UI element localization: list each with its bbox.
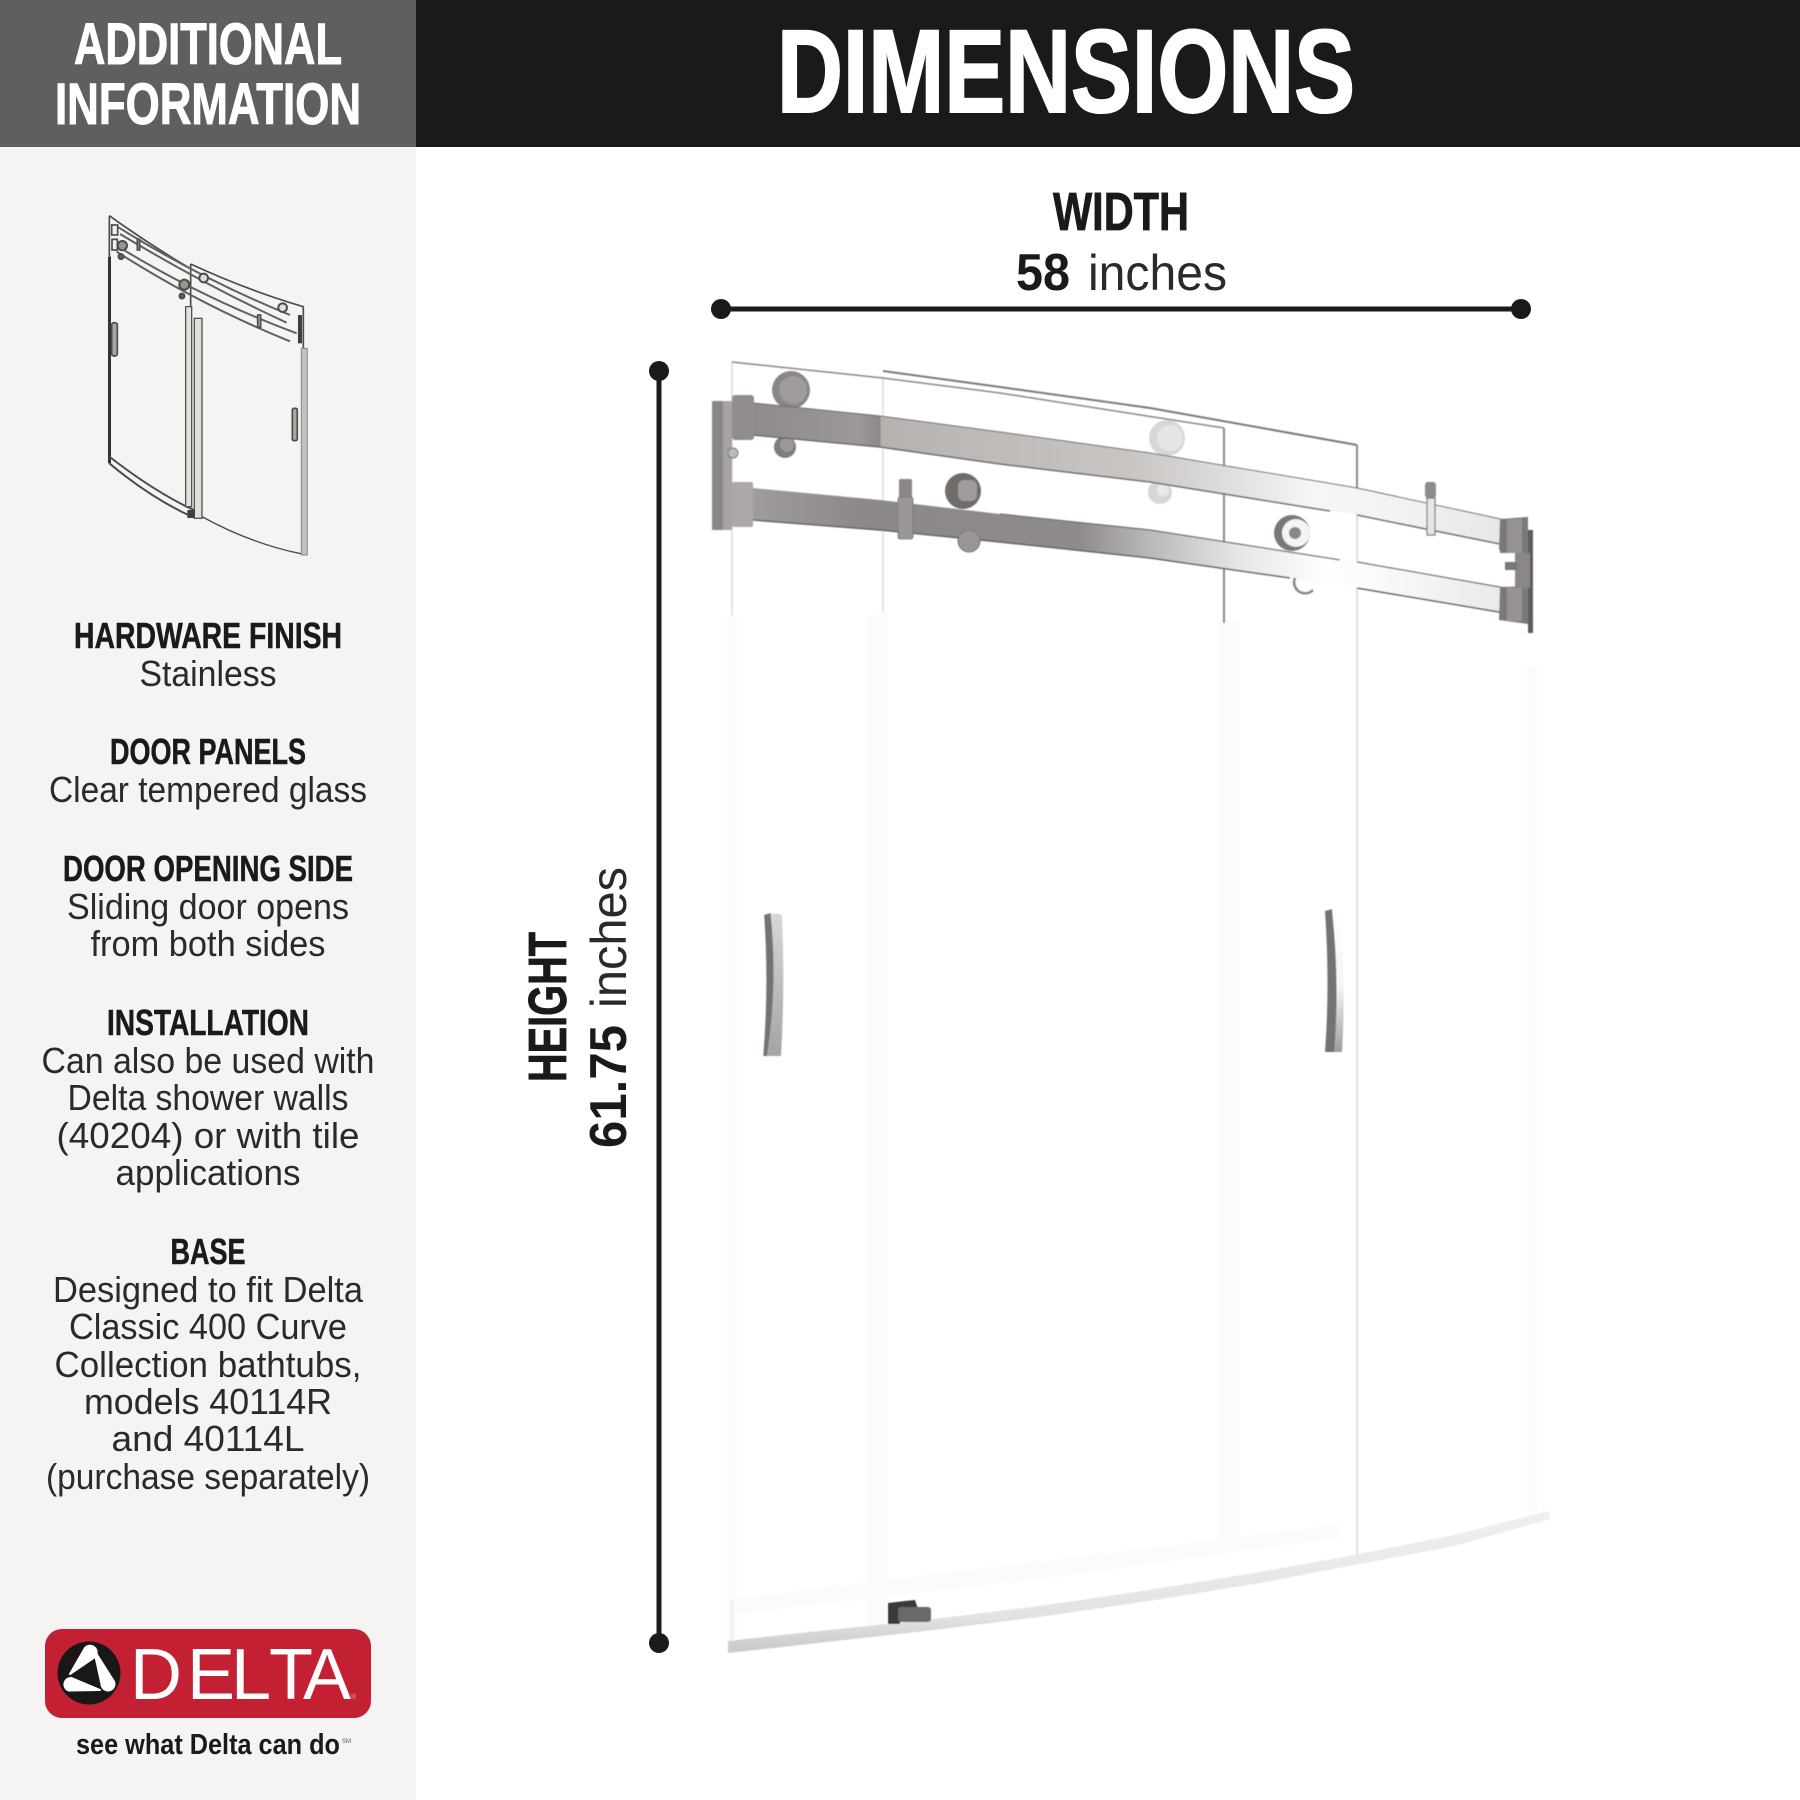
handle: left <box>763 913 783 1056</box>
spec: door opening side: Sliding door opens <box>67 886 349 927</box>
logo: delta: see what Delta can do <box>76 1729 340 1761</box>
curved bottom sill <box>728 1511 1551 1653</box>
wheel: top right <box>1149 420 1185 456</box>
spec: door opening side: from both sides <box>90 923 326 964</box>
spec: base: Classic 400 Curve <box>69 1306 347 1347</box>
spec: hardware finish <box>74 615 342 694</box>
spec: hardware finish: HARDWARE FINISH <box>74 615 342 656</box>
spec: base: BASE <box>170 1231 246 1272</box>
header: dimensions title: DIMENSIONS <box>777 6 1355 138</box>
spec: base <box>46 1231 370 1497</box>
rail: top <box>732 395 1505 545</box>
nuts under top rail <box>774 436 1172 504</box>
clip on lower rail <box>898 479 913 539</box>
left wall bracket <box>712 401 738 530</box>
spec: door panels <box>49 731 367 810</box>
spec: base: models 40114R <box>84 1381 332 1422</box>
spec: base: Collection bathtubs, <box>54 1344 362 1385</box>
height label <box>518 867 638 1148</box>
shower door illustration <box>712 362 1551 1653</box>
width label: WIDTH <box>1053 182 1189 242</box>
spec: base: Designed to fit Delta <box>53 1269 364 1310</box>
spec: installation: INSTALLATION <box>107 1002 309 1043</box>
header: additional information: ADDITIONAL <box>74 12 342 77</box>
spec: installation <box>42 1002 374 1193</box>
spec: installation: Delta shower walls <box>68 1077 348 1118</box>
sill clip <box>888 1600 931 1624</box>
spec: door panels: DOOR PANELS <box>110 731 306 772</box>
spec: door panels: Clear tempered glass <box>49 769 367 810</box>
height label: 61.75 <box>580 1025 638 1148</box>
logo: delta <box>45 1629 371 1761</box>
spec: base: and 40114L <box>112 1418 304 1459</box>
wheel: lower left <box>945 473 981 552</box>
wheel: top left <box>772 371 810 409</box>
header: additional information <box>0 0 416 147</box>
right wall bracket <box>1499 517 1533 633</box>
glass edge lines <box>732 362 1357 1640</box>
height label: HEIGHT <box>518 932 578 1082</box>
clip on top rail right <box>1425 482 1436 535</box>
spec: installation: (40204) or with tile <box>56 1115 360 1156</box>
spec: installation: Can also be used with <box>42 1040 374 1081</box>
arrow: width dimension line <box>711 299 1531 319</box>
width label <box>1016 182 1227 302</box>
logo: delta: SM <box>342 1739 351 1745</box>
logo: delta: DELTA <box>130 1635 351 1715</box>
panel: sidebar <box>0 147 416 1800</box>
spec: door opening side <box>63 848 353 964</box>
spec: installation: applications <box>116 1152 300 1193</box>
faint glass strips <box>727 612 1537 1644</box>
handle: right <box>1325 909 1344 1052</box>
logo: delta: ® <box>351 1693 357 1701</box>
height label: inches <box>581 867 637 1008</box>
spec: hardware finish: Stainless <box>140 653 276 694</box>
wheel: lower right chrome <box>1274 515 1313 593</box>
rail: bottom <box>732 482 1505 613</box>
width label: 58 <box>1016 244 1070 302</box>
icon: door thumbnail <box>108 216 307 555</box>
arrow: height dimension line <box>649 361 669 1653</box>
spec: base: (purchase separately) <box>46 1456 370 1497</box>
spec: door opening side: DOOR OPENING SIDE <box>63 848 353 889</box>
width label: inches <box>1088 245 1227 301</box>
header: dimensions title <box>416 0 1800 147</box>
header: additional information: INFORMATION <box>55 72 361 137</box>
